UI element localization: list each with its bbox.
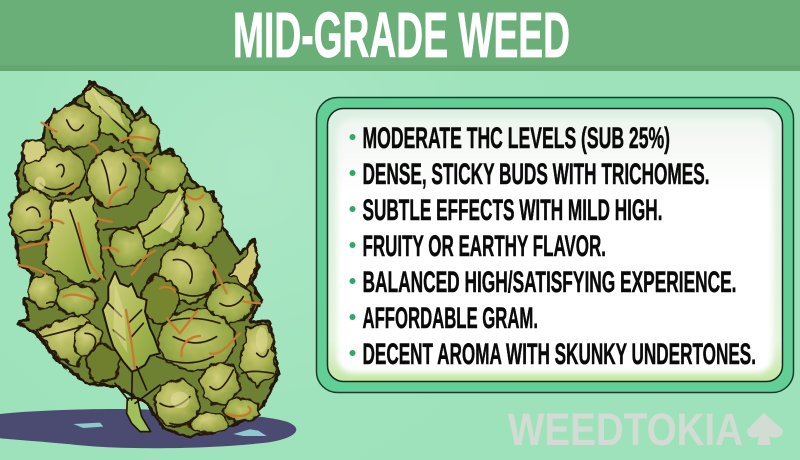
- illustration: cannabis bud with shadow: [0, 82, 296, 448]
- bullet list: [350, 122, 756, 371]
- bullet text: FRUITY OR EARTHY FLAVOR.: [362, 230, 606, 263]
- central leaf: [103, 272, 160, 372]
- panel inner frame: [328, 108, 782, 382]
- panel outer frame: [316, 98, 794, 392]
- watermark text: WEEDTOKIA: [508, 404, 743, 455]
- flower lobes: [10, 85, 277, 433]
- info panel: [316, 98, 794, 392]
- bud body: [10, 82, 278, 437]
- header band: [0, 0, 800, 71]
- bullet dots: [350, 134, 356, 356]
- panel white glow: [337, 118, 773, 373]
- leaf highlights: [35, 90, 268, 408]
- watermark spade icon: [747, 413, 783, 445]
- dark contour marks: [20, 107, 273, 425]
- watermark: [508, 404, 783, 455]
- orange hairs: [18, 123, 260, 416]
- shadow highlights: [73, 423, 267, 436]
- bud silhouette: [10, 82, 278, 437]
- stem: [127, 398, 151, 432]
- ground shadow: [0, 409, 296, 448]
- bullet text: [362, 122, 756, 371]
- stem lines: [115, 367, 160, 403]
- bullet text: AFFORDABLE GRAM.: [362, 302, 538, 335]
